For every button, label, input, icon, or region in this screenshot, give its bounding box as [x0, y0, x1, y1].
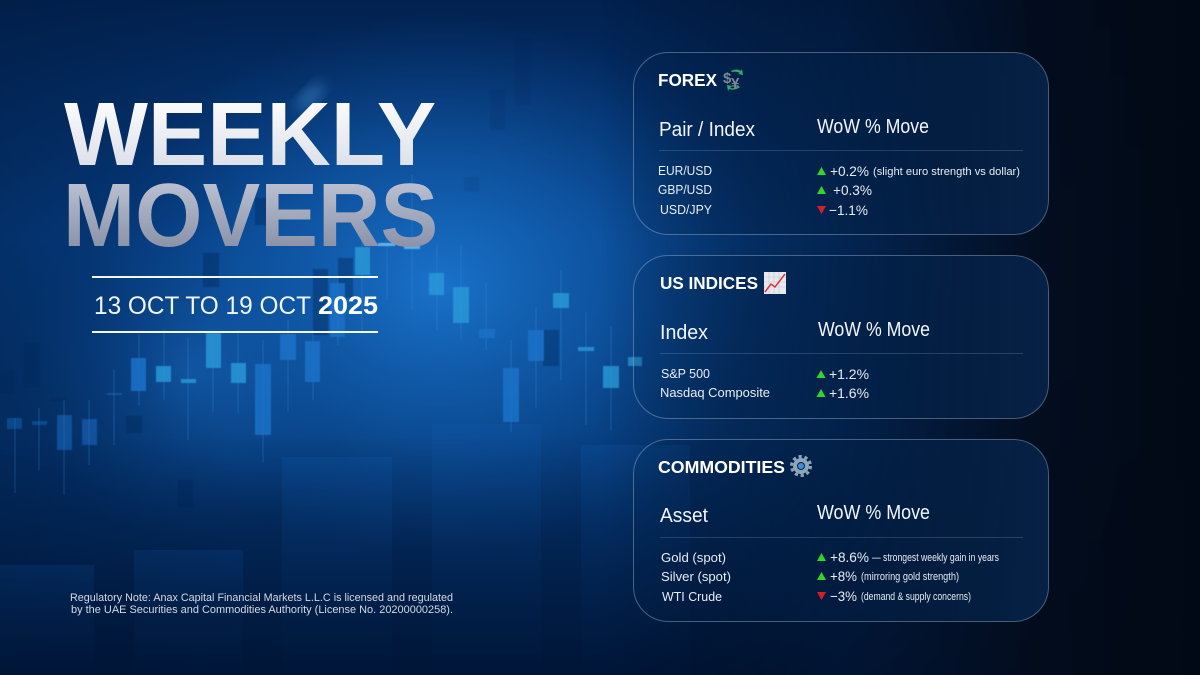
- background chart: candle wicks: [15, 175, 611, 495]
- row: Gold: [661, 549, 999, 565]
- panel: us indices: [634, 256, 1048, 418]
- row: Gold: Gold (spot): [661, 550, 726, 565]
- background chart: dark candles: [0, 38, 559, 507]
- regulatory note: Regulatory Note: Anax Capital Financial Markets L.L.C is licensed and regulated: [70, 592, 453, 604]
- icon: currency exchange: $: [723, 70, 732, 87]
- row: Nasdaq Composite: [660, 385, 869, 401]
- panel: commodities: [634, 440, 1048, 622]
- icon: chart increasing: [764, 272, 786, 294]
- heading: us indices: US INDICES: [660, 273, 758, 293]
- column headers: WoW % Move: [817, 116, 929, 138]
- column headers: [660, 502, 930, 527]
- row: EUR/USD: (slight euro strength vs dollar): [873, 166, 1020, 178]
- background chart: large translucent bars: [0, 424, 690, 675]
- column headers: [660, 319, 930, 344]
- column headers: WoW % Move: [818, 319, 930, 341]
- icon: gear: [792, 456, 810, 476]
- background chart: bright candles: [7, 240, 642, 450]
- icon: currency exchange: [723, 69, 743, 92]
- row: Silver: Silver (spot): [661, 569, 731, 584]
- title: Weekly Movers: [63, 84, 438, 265]
- date range: 2025: [318, 292, 378, 320]
- row: GBP/USD: +0.3%: [833, 182, 872, 198]
- row: Silver: +8%: [830, 568, 857, 584]
- column headers: Pair / Index: [659, 119, 755, 141]
- row: GBP/USD: GBP/USD: [658, 182, 712, 197]
- date range: 13 OCT TO 19 OCT: [94, 292, 311, 320]
- row: Nasdaq Composite: Nasdaq Composite: [660, 385, 770, 400]
- row: GBP/USD: [658, 182, 872, 198]
- regulatory note: [70, 592, 453, 616]
- column headers: [659, 116, 929, 141]
- row: WTI Crude: (demand & supply concerns): [861, 591, 971, 603]
- row: USD/JPY: [660, 202, 868, 218]
- heading: commodities: COMMODITIES: [658, 457, 785, 477]
- row: Gold: — strongest weekly gain in years: [872, 552, 999, 564]
- row: Silver: (mirroring gold strength): [861, 571, 959, 583]
- regulatory note: by the UAE Securities and Commodities Authority (License No. 20200000258).: [71, 604, 453, 616]
- row: EUR/USD: EUR/USD: [658, 163, 712, 178]
- heading: forex: FOREX: [658, 70, 717, 90]
- row: S&P 500: +1.2%: [829, 366, 869, 382]
- row: Nasdaq Composite: +1.6%: [829, 385, 869, 401]
- row: EUR/USD: +0.2%: [830, 163, 869, 179]
- title: Weekly Movers: WEEKLY: [64, 84, 436, 184]
- column headers: WoW % Move: [817, 502, 930, 524]
- row: S&P 500: S&P 500: [661, 366, 710, 381]
- row: EUR/USD: [658, 163, 1020, 179]
- panel: forex: [634, 52, 1048, 234]
- row: USD/JPY: −1.1%: [829, 202, 868, 218]
- row: Silver: [661, 568, 959, 584]
- row: WTI Crude: WTI Crude: [662, 589, 722, 604]
- row: USD/JPY: USD/JPY: [660, 202, 712, 217]
- column headers: Asset: [660, 505, 708, 527]
- icon: currency exchange: ¥: [731, 75, 740, 92]
- column headers: Index: [660, 322, 708, 344]
- row: S&P 500: [661, 366, 869, 382]
- row: WTI Crude: −3%: [830, 588, 857, 604]
- row: Gold: +8.6%: [830, 549, 869, 565]
- title: Weekly Movers: MOVERS: [63, 164, 438, 265]
- date range: [92, 276, 378, 333]
- row: WTI Crude: [662, 588, 971, 604]
